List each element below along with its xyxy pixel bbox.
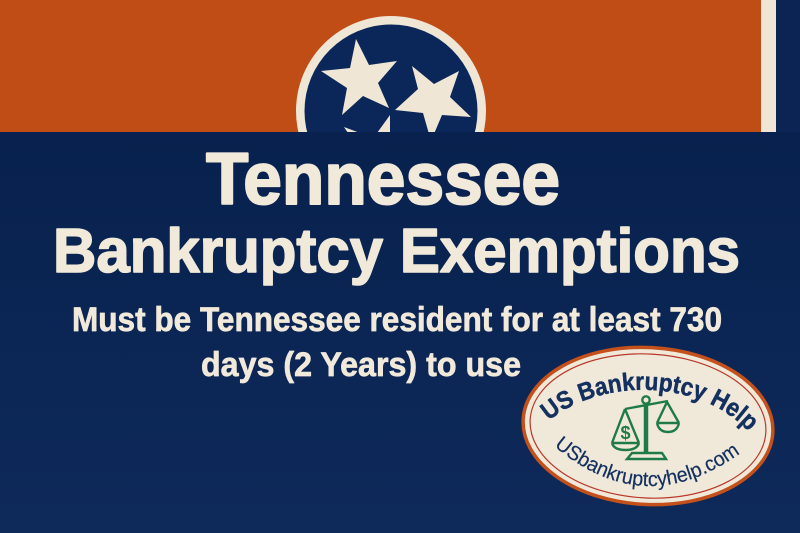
badge website: USbankruptcyhelp.com — [557, 436, 740, 490]
badge oval — [519, 341, 777, 511]
icon: scales with dollar sign — [612, 396, 679, 459]
logo badge — [521, 346, 775, 506]
icon: scales with dollar sign: $ — [620, 423, 631, 443]
title: Tennessee — [206, 139, 560, 220]
title — [53, 139, 740, 286]
subtitle: residency requirement: days (2 Years) to use — [201, 346, 521, 384]
subtitle: residency requirement — [72, 301, 722, 384]
title: Bankruptcy Exemptions — [53, 217, 740, 286]
navy lower panel — [0, 132, 800, 533]
badge name: US Bankruptcy Help — [539, 372, 756, 430]
subtitle: residency requirement: Must be Tennessee resident for at least 730 — [72, 301, 722, 339]
flag emblem: three stars in circle — [296, 16, 486, 206]
